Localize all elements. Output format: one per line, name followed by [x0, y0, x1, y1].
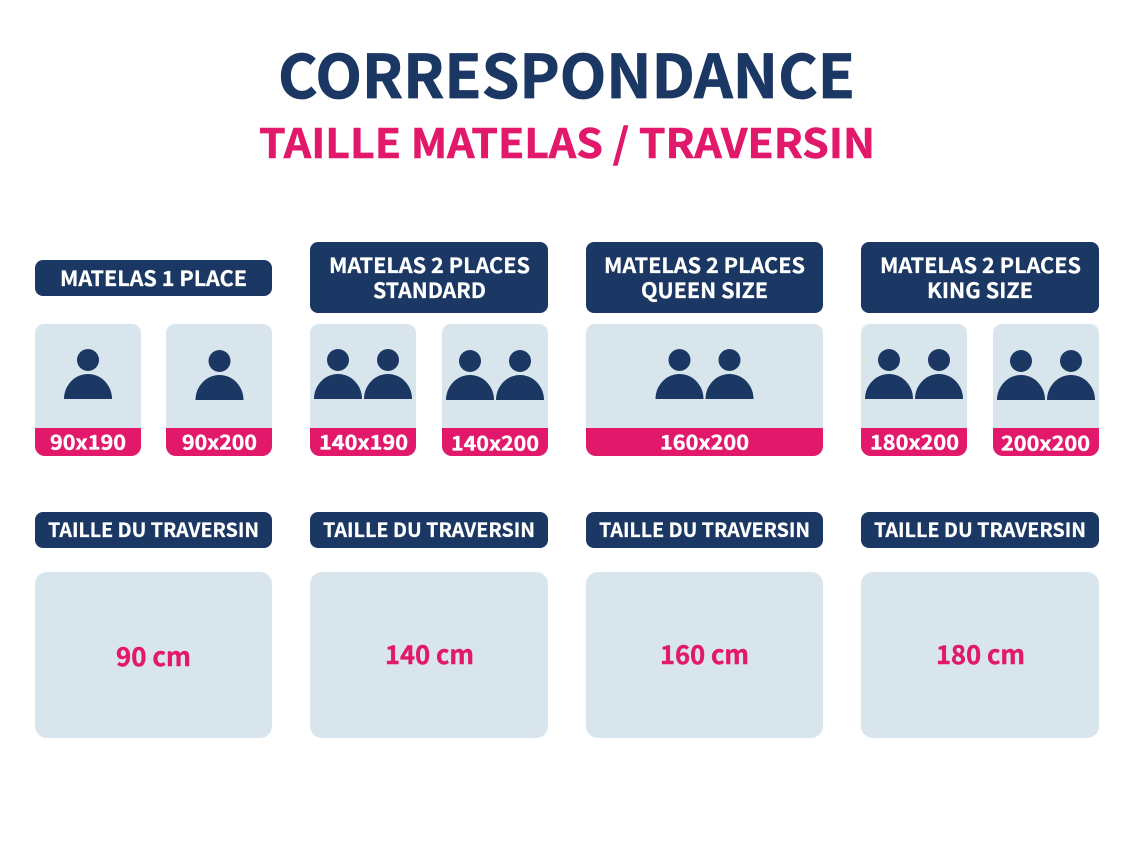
heading: matelas 2 places queen size — [586, 242, 823, 313]
subtitle: TAILLE MATELAS / TRAVERSIN — [259, 111, 875, 170]
panel: traversin 90 cm: 90 cm — [116, 637, 191, 674]
heading: matelas 2 places queen size: MATELAS 2 PLACES — [604, 250, 805, 280]
title: CORRESPONDANCE — [278, 29, 855, 116]
mattress card: 90x200: 90x200 — [182, 426, 257, 456]
panel: traversin 180 cm: 180 cm — [936, 635, 1025, 672]
heading: matelas 2 places standard: MATELAS 2 PLACES — [329, 250, 530, 280]
mattress card: 140x190 — [310, 324, 416, 456]
mattress card: 140x200: 140x200 — [451, 428, 539, 456]
panel: traversin 160 cm: 160 cm — [660, 635, 749, 672]
panel: traversin 140 cm: 140 cm — [385, 635, 474, 672]
heading: matelas 1 place — [35, 260, 272, 296]
heading: taille du traversin 2: TAILLE DU TRAVERSIN — [323, 514, 535, 543]
heading: taille du traversin 3: TAILLE DU TRAVERSIN — [599, 514, 810, 543]
mattress card: 90x200 — [166, 324, 272, 456]
heading: matelas 2 places king size: MATELAS 2 PLACES — [880, 250, 1081, 280]
panel: traversin 90 cm — [35, 572, 272, 738]
mattress card: 90x190 — [35, 324, 141, 456]
mattress card: 180x200: 180x200 — [870, 426, 959, 456]
mattress card: 200x200: 200x200 — [1001, 428, 1090, 456]
mattress card: 90x190: 90x190 — [50, 426, 126, 456]
heading: matelas 2 places queen size: QUEEN SIZE — [641, 275, 768, 305]
panel: traversin 140 cm — [310, 572, 548, 738]
mattress card: 160x200: 160x200 — [660, 426, 749, 456]
panel: traversin 180 cm — [861, 572, 1099, 738]
mattress card: 140x200 — [442, 324, 548, 456]
mattress card: 140x190: 140x190 — [319, 426, 408, 456]
heading: matelas 2 places standard — [310, 242, 548, 313]
heading: taille du traversin 4: TAILLE DU TRAVERSIN — [874, 514, 1086, 543]
panel: traversin 160 cm — [586, 572, 823, 738]
heading: matelas 1 place: MATELAS 1 PLACE — [60, 263, 247, 293]
mattress card: 200x200 — [993, 324, 1099, 456]
heading: taille du traversin 1: TAILLE DU TRAVERSIN — [48, 514, 259, 543]
mattress card: 180x200 — [861, 324, 967, 456]
heading: matelas 2 places king size — [861, 242, 1099, 313]
heading: matelas 2 places standard: STANDARD — [373, 275, 486, 305]
mattress card: 160x200 — [586, 324, 823, 456]
heading: matelas 2 places king size: KING SIZE — [927, 275, 1033, 305]
